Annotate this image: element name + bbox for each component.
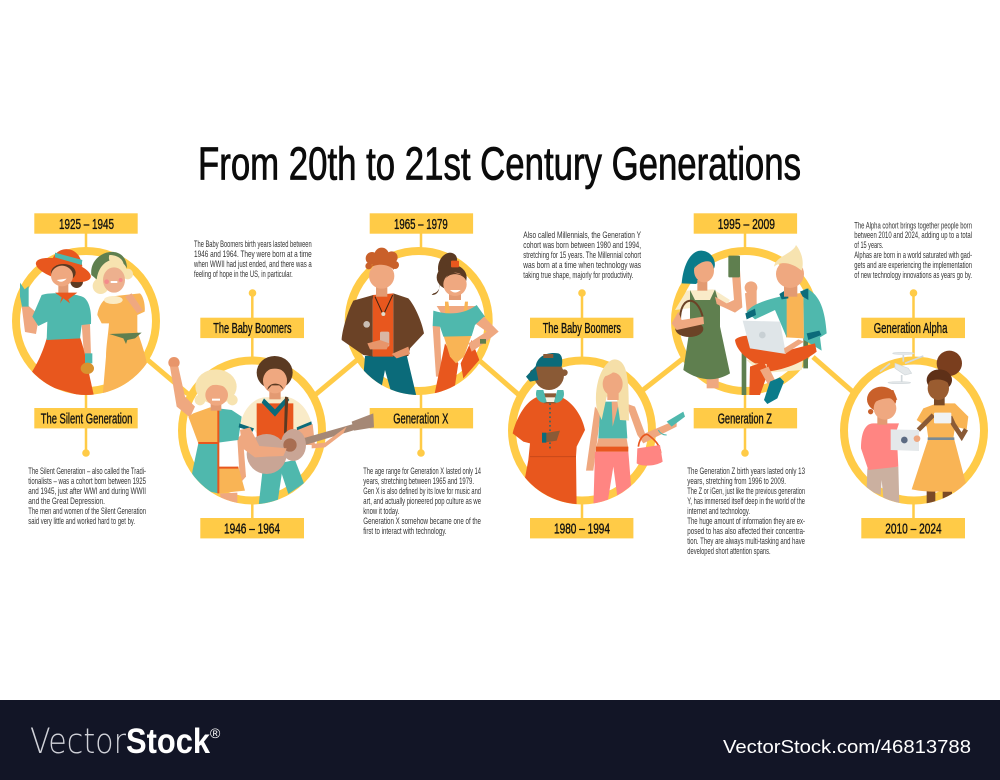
description: posed to has also affected their concentra- [687,526,805,536]
description: The age range for Generation X lasted only 14 [363,466,481,476]
description: and the Great Depression. [28,496,105,506]
description: years, stretching from 1996 to 2009. [687,476,786,486]
description [28,466,146,526]
date label: 1980 – 1994 [554,522,610,538]
description [854,220,972,280]
description: The Silent Generation – also called the Tradi- [28,466,146,476]
dot [578,289,586,297]
panel: Generation X [342,213,499,536]
ring and stems [16,233,156,452]
date label [861,518,965,538]
dot [741,449,749,457]
ring and stems [349,233,489,452]
date label [694,213,797,234]
characters: alpha children with drone [861,351,968,505]
date label: 1946 – 1964 [224,522,280,538]
description: 1946 and 1964. They were born at a time [194,249,312,259]
description: cohort was born between 1980 and 1994, [523,240,641,250]
description: The huge amount of information they are ex- [687,516,805,526]
description: stretching for 15 years. The Millennial cohort [523,250,641,260]
panel: Generation Z [672,213,827,556]
name label [694,408,797,428]
timeline connectors [146,357,853,395]
ring and stems [512,294,652,519]
description: tion. They are always multi-tasking and have [687,536,805,546]
name label: The Silent Generation [41,412,132,428]
description: Generation X somehow became one of the [363,516,481,526]
characters: boomer couple with guitar [168,356,374,508]
name label [530,318,633,338]
description: know it today. [363,506,399,516]
drone [880,352,923,384]
description [363,466,481,536]
panel: Generation Y (labelled The Baby Boomers) [512,230,685,538]
description: Gen X is also defined by its love for music and [363,486,481,496]
description: of 15 years. [854,240,883,250]
description: art, and actually pioneered pop culture as we [363,496,481,506]
name label [861,318,965,338]
panel: The Silent Generation [16,213,156,526]
date label: 2010 – 2024 [885,522,942,538]
date label: 1995 – 2009 [718,217,775,233]
name label: Generation Alpha [874,321,948,337]
description [523,230,641,280]
description: Y, has immersed itself deep in the world of the [687,496,805,506]
date label [34,213,138,234]
description: taking true shape, majorly for productivity. [523,270,633,280]
description: and 1945, just after WWI and during WWII [28,486,146,496]
description [193,239,312,279]
description: was born at a time when technology was [523,260,641,270]
description: The Baby Boomers birth years lasted between [194,239,312,249]
characters: millennial couple [513,353,685,510]
name label: The Baby Boomers [543,321,621,337]
description: Also called Millennials, the Generation Y [523,230,641,240]
description [687,466,805,556]
description: developed short attention spans. [687,546,771,556]
dot [82,449,90,457]
characters: silent generation women [20,249,147,407]
date label [200,518,304,538]
description: internet and technology. [687,506,750,516]
footer bar [0,700,1000,780]
title: From 20th to 21st Century Generations [198,138,801,190]
description: said very little and worked hard to get by. [28,516,135,526]
description: The Generation Z birth years lasted only 13 [687,466,805,476]
ring and stems [844,294,984,519]
date label: 1925 – 1945 [59,217,114,233]
characters: gen x couple [342,248,499,400]
name label [200,318,304,338]
date label [370,213,473,234]
characters: gen z couple [672,245,827,404]
guitar [295,424,355,447]
registered mark: ® [210,725,221,741]
stock url: VectorStock.com/46813788 [723,736,971,757]
description: first to interact with technology. [363,526,447,536]
dot [249,289,256,297]
dot [417,449,425,457]
description: years, stretching between 1965 and 1979. [363,476,474,486]
logo wordmark: Stock [126,722,210,761]
name label [370,408,473,428]
date label [530,518,633,538]
description: The men and women of the Silent Generation [28,506,146,516]
name label: Generation X [393,412,448,428]
logo wordmark: Vector [30,722,127,762]
bracelet and phone [658,430,667,435]
ring and stems [182,294,322,519]
bag [638,434,661,453]
panel: Generation Alpha [844,220,984,538]
description: The Z or iGen, just like the previous generation [687,486,805,496]
dot [910,289,917,297]
ring and stems [675,233,815,452]
description: when WWII had just ended, and there was a [193,259,312,269]
description: feeling of hope in the US, in particular. [194,269,293,279]
date label: 1965 – 1979 [394,217,448,233]
panel: The Baby Boomers [168,239,374,538]
name label: The Baby Boomers [213,321,292,337]
name label: Generation Z [718,412,772,428]
name label [34,408,138,428]
description: tionalists – was a cohort born between 1925 [28,476,146,486]
